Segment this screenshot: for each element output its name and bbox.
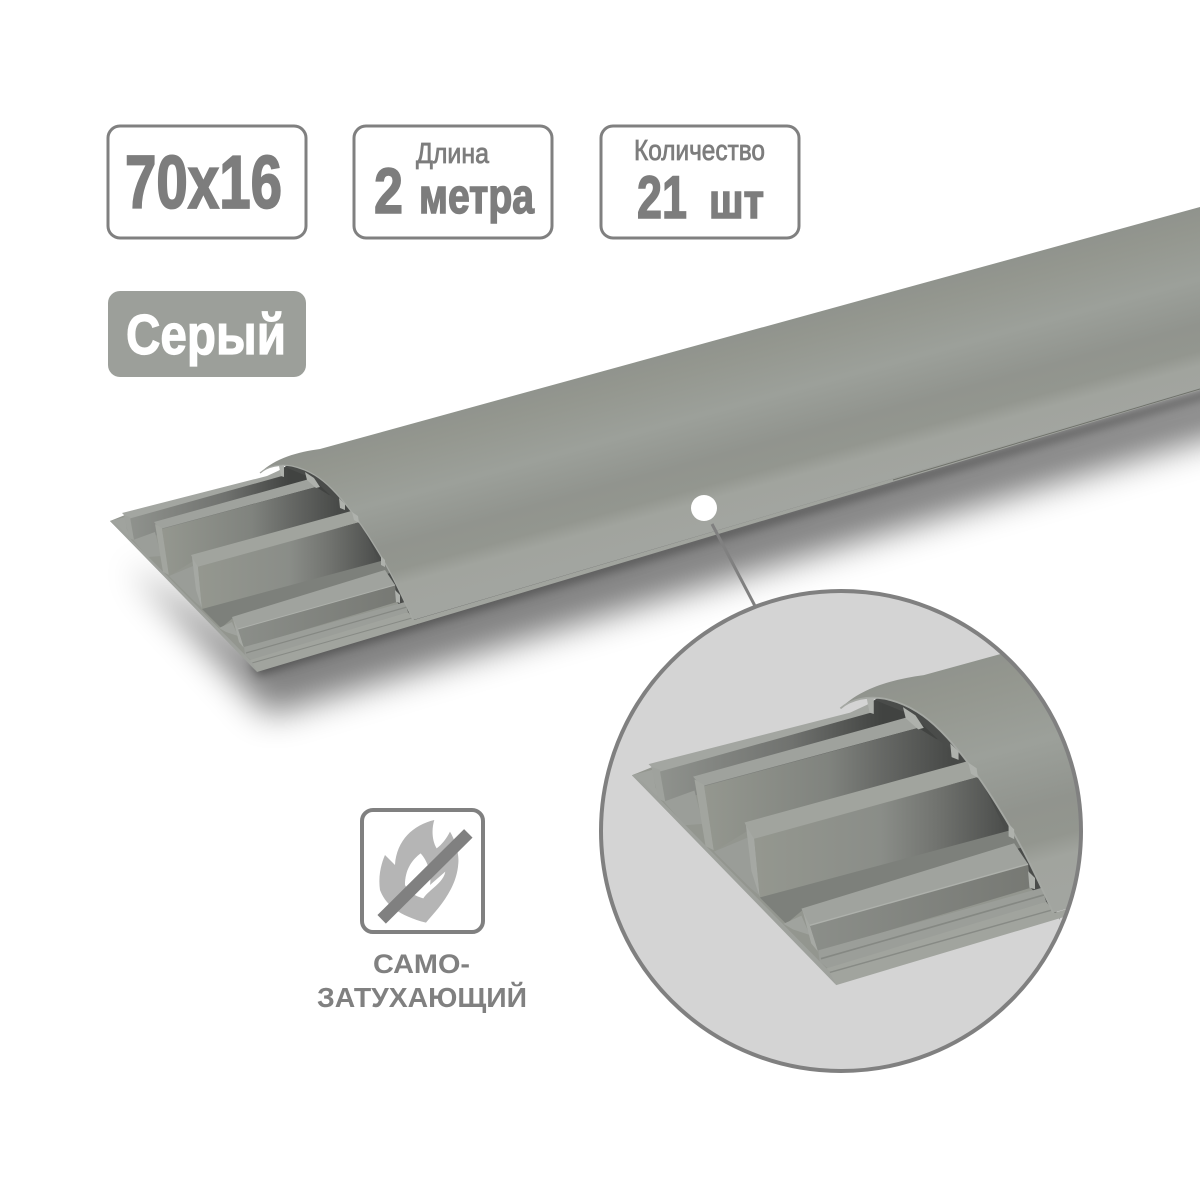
label: self-extinguishing	[317, 949, 527, 1013]
callout pointer line	[712, 524, 755, 606]
label: self-extinguishing: ЗАТУХАЮЩИЙ	[317, 982, 527, 1013]
icon: self-extinguishing flame	[362, 810, 483, 932]
quantity badge: 21 pcs: шт	[709, 175, 764, 229]
label: self-extinguishing: САМО-	[373, 949, 470, 979]
length badge: 2 metres	[354, 126, 552, 238]
size badge: 70x16: 70x16	[125, 140, 282, 224]
product: floor cable duct	[110, 207, 1200, 672]
length badge: 2 metres: метра	[419, 170, 535, 224]
quantity badge: 21 pcs	[601, 126, 799, 238]
quantity badge: 21 pcs: 21	[637, 164, 687, 231]
product shadow	[130, 375, 1200, 715]
quantity badge: 21 pcs: Количество	[634, 135, 765, 167]
length badge: 2 metres: Длина	[416, 138, 490, 170]
length badge: 2 metres: 2	[374, 155, 403, 227]
size badge: 70x16	[108, 126, 306, 238]
callout dot	[691, 495, 717, 521]
zoomed detail circle	[599, 589, 1083, 1073]
colour badge: grey: Серый	[126, 303, 286, 367]
colour badge: grey	[108, 291, 306, 377]
